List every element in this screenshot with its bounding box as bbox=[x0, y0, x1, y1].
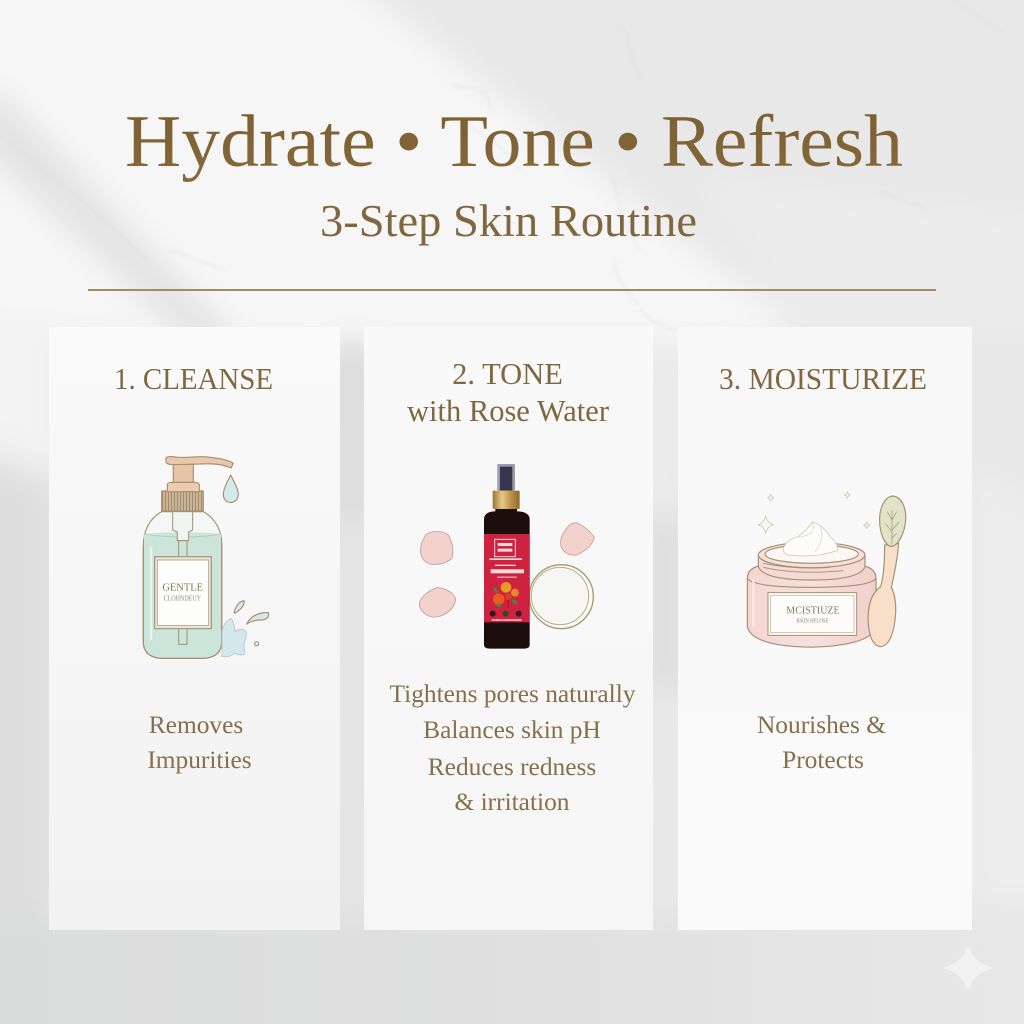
label text: sub: KKIN HFLOSE bbox=[797, 619, 829, 625]
panel: moisturize bbox=[678, 327, 972, 930]
heading: 1. CLEANSE: 1. CLEANSE bbox=[114, 361, 273, 396]
red label bbox=[484, 534, 530, 622]
icon: cotton pad bbox=[529, 565, 593, 629]
corner sparkle bbox=[943, 944, 993, 992]
icon: rose petals bbox=[419, 523, 594, 617]
caption: rose water benefits: & irritation bbox=[455, 788, 570, 816]
caption: nourishes and protects bbox=[757, 711, 886, 774]
header divider line bbox=[88, 289, 936, 291]
jar label bbox=[768, 593, 857, 635]
caption: removes impurities bbox=[147, 711, 252, 774]
spoon bbox=[868, 543, 899, 647]
jar neck bbox=[758, 555, 865, 580]
spray nozzle bbox=[497, 464, 515, 491]
subtitle: 3-Step Skin Routine bbox=[320, 196, 697, 246]
caption: nourishes and protects: Nourishes & bbox=[757, 711, 886, 739]
caption: removes impurities: Impurities bbox=[147, 746, 252, 774]
heading: 2. TONE with Rose Water bbox=[407, 357, 609, 428]
label text: GENTLE: GENTLE bbox=[162, 582, 203, 593]
caption: rose water benefits: Balances skin pH bbox=[423, 716, 601, 744]
bottle body bbox=[484, 511, 530, 649]
floral art bbox=[490, 582, 522, 617]
caption: nourishes and protects: Protects bbox=[782, 746, 864, 774]
jar base bbox=[747, 565, 876, 647]
cream swirl bbox=[783, 522, 837, 556]
panel: cleanse bbox=[49, 327, 340, 930]
icon: pump bottle bbox=[143, 457, 269, 658]
icon: cream jar with spoon bbox=[747, 492, 906, 647]
caption: removes impurities: Removes bbox=[149, 711, 243, 739]
caption: rose water benefits: Reduces redness bbox=[428, 753, 596, 781]
icon: rose water spray bottle with petals bbox=[419, 464, 594, 649]
heading: 2. TONE with Rose Water: with Rose Water bbox=[407, 394, 609, 428]
sparkles bbox=[758, 492, 870, 533]
label text: MOISTURIZE: MCISTIUZE bbox=[786, 606, 840, 617]
panel: tone bbox=[364, 327, 653, 930]
caption: rose water benefits bbox=[390, 680, 636, 816]
title: Hydrate • Tone • Refresh bbox=[125, 101, 903, 183]
heading: 2. TONE with Rose Water: 2. TONE bbox=[452, 357, 563, 391]
marble background bbox=[0, 0, 776, 1024]
heading: 3. MOISTURIZE: 3. MOISTURIZE bbox=[719, 361, 927, 396]
caption: rose water benefits: Tightens pores naturally bbox=[390, 680, 636, 708]
label text: Cleanser: CLOHNDEUY bbox=[164, 594, 202, 603]
